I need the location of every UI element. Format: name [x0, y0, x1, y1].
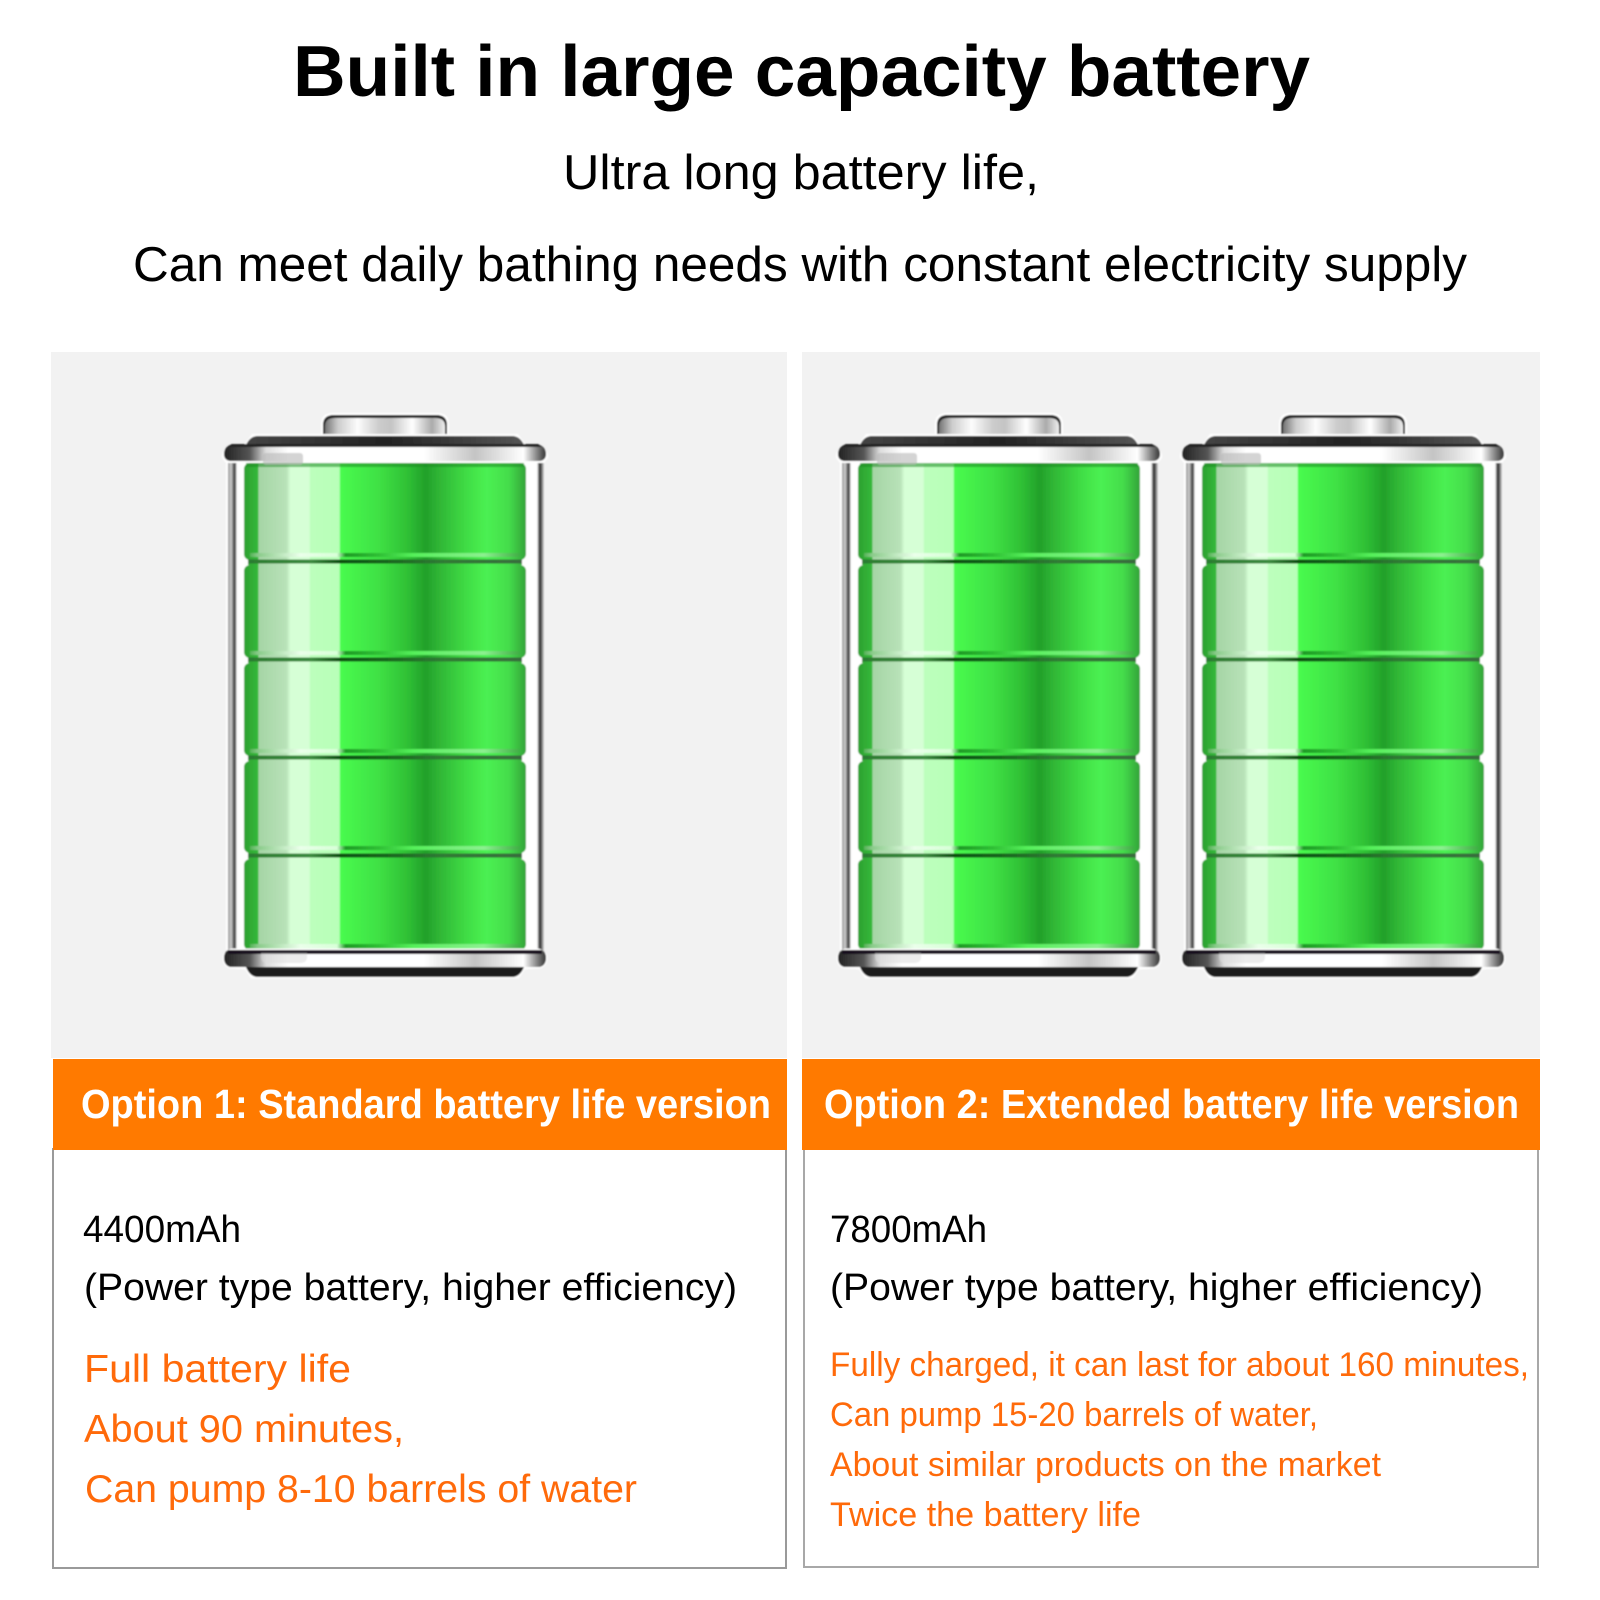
battery type: (Power type battery, higher efficiency): [830, 1267, 1483, 1309]
runtime text: Can pump 8-10 barrels of water: [85, 1468, 637, 1511]
runtime text: Fully charged, it can last for about 160 minutes,: [830, 1346, 1529, 1384]
subtitle line 2: Can meet daily bathing needs with constant electricity supply: [133, 238, 1467, 292]
battery image area: [802, 352, 1540, 1058]
icon: single battery: [222, 413, 548, 977]
details box: [804, 1149, 1538, 1567]
runtime text: [830, 1346, 1529, 1534]
title: Built in large capacity battery: [293, 32, 1310, 112]
runtime text: Twice the battery life: [830, 1496, 1141, 1534]
icon: second battery: [1180, 413, 1506, 977]
runtime text: About similar products on the market: [830, 1446, 1382, 1484]
orange heading band: [802, 1059, 1540, 1150]
runtime text: About 90 minutes,: [84, 1408, 404, 1451]
runtime text: [84, 1348, 637, 1511]
subtitle line 1: Ultra long battery life,: [563, 146, 1039, 200]
panel: option 1: [51, 352, 787, 1568]
icon: first battery: [836, 413, 1162, 977]
capacity: 7800mAh: [830, 1209, 987, 1251]
orange heading band: [53, 1059, 787, 1150]
details box: [53, 1149, 786, 1568]
capacity: 4400mAh: [83, 1209, 241, 1251]
runtime text: Full battery life: [84, 1348, 351, 1391]
panel: option 2: [802, 352, 1540, 1567]
runtime text: Can pump 15-20 barrels of water,: [830, 1396, 1318, 1434]
option 2 heading: Option 2: Extended battery life version: [824, 1081, 1519, 1127]
battery image area: [51, 352, 787, 1058]
option 1 heading: Option 1: Standard battery life version: [81, 1081, 771, 1127]
battery type: (Power type battery, higher efficiency): [84, 1267, 737, 1309]
